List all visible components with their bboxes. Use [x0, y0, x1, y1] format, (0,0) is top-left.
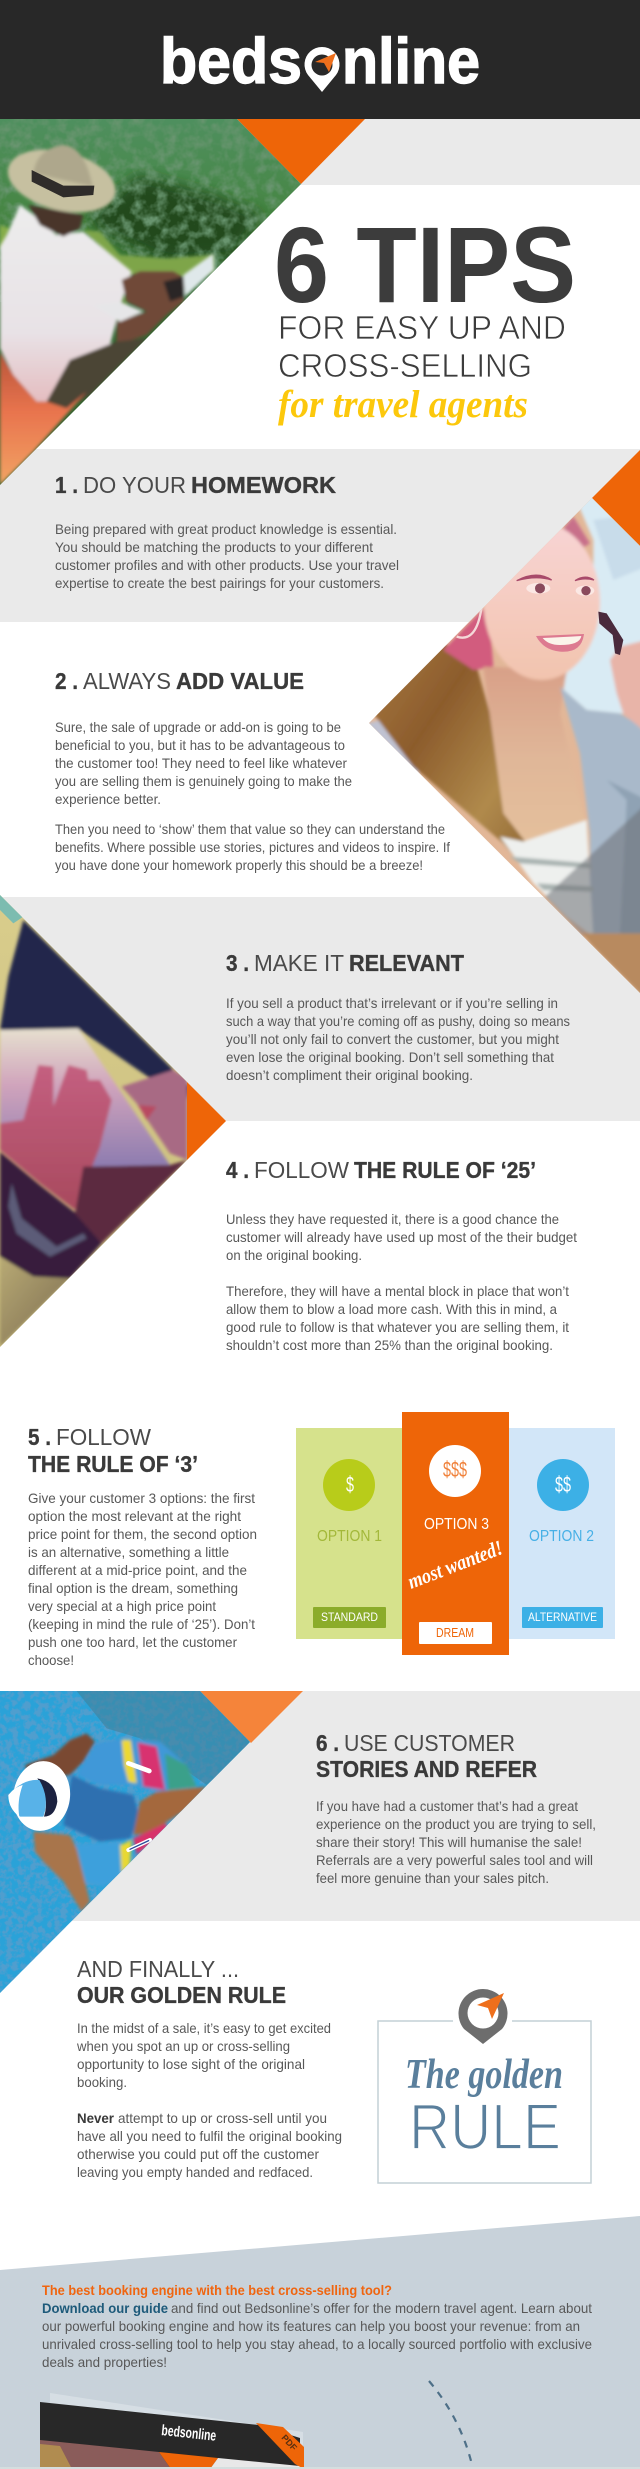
text: tip 5 body: different at a mid-price point, and the	[28, 1563, 247, 1578]
text: tip 5 body: is an alternative, something a little	[28, 1545, 229, 1560]
photo: hands holding tablet	[0, 895, 187, 1347]
heading: tip 4: FOLLOW	[254, 1157, 349, 1183]
text: footer copy: unrivaled cross-selling tool to help you stay ahead, to a locally sourced portfolio with exclusive	[42, 2337, 592, 2352]
text: tip 6 body	[316, 1799, 596, 1886]
text: tip 1 body	[55, 522, 399, 591]
panel: tip 1	[0, 449, 640, 622]
text: tip 5 body: very special at a high price point	[28, 1599, 216, 1614]
text: tip 1 body: Being prepared with great product knowledge is essential.	[55, 522, 397, 537]
panel: golden rule	[76, 1956, 591, 2183]
text: footer copy: The best booking engine with the best cross-selling tool?	[42, 2282, 392, 2298]
text: tip 6 body: share their story! This will humanise the sale!	[316, 1835, 582, 1850]
panel: tip 6	[0, 1691, 640, 1921]
heading: golden rule	[77, 1956, 286, 2008]
text: golden rule body: booking.	[77, 2075, 127, 2090]
logo: bedsonline: nline	[342, 25, 480, 97]
text: tip 1 body: customer profiles and with other products. Use your travel	[55, 558, 399, 573]
heading: tip 5: THE RULE OF ‘3’	[28, 1451, 198, 1477]
text: tip 5 body: Give your customer 3 options: the first	[28, 1491, 255, 1506]
photo: man with tablet in green landscape	[0, 115, 310, 492]
text: tip 2 body: you have done your homework properly this should be a breeze!	[55, 858, 423, 873]
subtitle: FOR EASY UP AND	[278, 309, 566, 346]
text: tip 5 body: (keeping in mind the rule of ‘25’). Don’t	[28, 1617, 255, 1632]
text: tip 6 body: Referrals are a very powerful sales tool and will	[316, 1853, 593, 1868]
text: tip 4 body: allow them to blow a load more cash. With this in mind, a	[226, 1302, 557, 1317]
text: tip 5 body: push one too hard, let the customer	[28, 1635, 237, 1650]
heading: tip 2: 2 .	[55, 668, 78, 694]
arrow: dashed curve	[429, 2381, 473, 2469]
card: option 2	[509, 1428, 615, 1639]
text: tip 2 body: the customer too! They need to feel like whatever	[55, 756, 347, 771]
text: tip 5 body: option the most relevant at the right	[28, 1509, 241, 1524]
card: option 3: DREAM	[436, 1625, 474, 1640]
heading: tip 1: HOMEWORK	[191, 472, 336, 498]
heading: tip 1: DO YOUR	[83, 472, 186, 498]
text: tip 3 body	[226, 996, 570, 1083]
card: option 1	[296, 1428, 402, 1639]
card: option 3	[402, 1412, 509, 1655]
brochure: pdf guide: PDF	[280, 2433, 299, 2453]
text: tip 2 body: experience better.	[55, 792, 161, 807]
card: option 2: OPTION 2	[529, 1528, 594, 1545]
script label: most wanted: most wanted!	[404, 1535, 506, 1594]
card: option 2: $$	[555, 1472, 571, 1497]
text: tip 1 body: expertise to create the best pairings for your customers.	[55, 576, 384, 591]
text: tip 4 body: Therefore, they will have a mental block in place that won’t	[226, 1284, 569, 1299]
badge: the golden rule	[378, 1989, 591, 2183]
heading: tip 3	[226, 950, 464, 976]
text: tip 2 body	[55, 720, 450, 873]
text: tip 2 body: Sure, the sale of upgrade or add-on is going to be	[55, 720, 341, 735]
title: 6 tips: 6 TIPS	[274, 204, 576, 325]
text: tip 3 body: you’ll not only fail to convert the customer, but you might	[226, 1032, 559, 1047]
heading: tip 6: 6 .	[316, 1730, 339, 1756]
heading: tip 3: MAKE IT	[254, 950, 344, 976]
text: tip 4 body: customer will already have used up most of the their budget	[226, 1230, 577, 1245]
text: golden rule body: otherwise you could put off the customer	[77, 2147, 319, 2162]
text: tip 4 body: on the original booking.	[226, 1248, 362, 1263]
text: tip 5 body: choose!	[28, 1653, 74, 1668]
text: tip 5 body	[28, 1491, 257, 1668]
text: golden rule body: have all you need to fulfil the original booking	[77, 2129, 342, 2144]
text: tip 3 body: If you sell a product that’s irrelevant or if you’re selling in	[226, 996, 558, 1011]
photo: smiling woman on phone	[360, 480, 640, 1000]
heading: tip 3: RELEVANT	[349, 950, 464, 976]
card: option 2: ALTERNATIVE	[528, 1610, 597, 1624]
panel: tip 3	[0, 895, 640, 1121]
text: golden rule body: when you spot an up or cross-selling	[76, 2039, 290, 2054]
header bar	[0, 0, 640, 119]
card: option 1: STANDARD	[321, 1610, 378, 1624]
brochure: pdf guide: bedsonline	[161, 2422, 217, 2445]
text: tip 4 body	[226, 1212, 577, 1353]
text: tip 2 body: benefits. Where possible use stories, pictures and videos to inspire. If	[55, 840, 450, 855]
text: footer copy: deals and properties!	[42, 2355, 167, 2370]
text: tip 4 body: shouldn’t cost more than 25% than the original booking.	[226, 1338, 553, 1353]
heading: tip 2	[55, 668, 304, 694]
text: footer copy: our powerful booking engine and how its features can help you boost your revenue: from an	[42, 2319, 580, 2334]
panel: tip 5	[28, 1412, 615, 1668]
logo: bedsonline: beds	[160, 25, 302, 97]
decorative triangle: tip 6 orange	[200, 1691, 303, 1743]
panel: tip 4	[0, 1121, 640, 1371]
badge: the golden rule: The golden	[405, 2052, 563, 2098]
decorative triangle: tip 1 orange	[592, 450, 640, 546]
text: golden rule body: In the midst of a sale, it’s easy to get excited	[77, 2021, 331, 2036]
heading: tip 1: 1 .	[55, 472, 78, 498]
text: golden rule body: attempt to up or cross-sell until you	[118, 2111, 327, 2126]
heading: tip 5: FOLLOW	[56, 1424, 151, 1450]
card: option 3: OPTION 3	[424, 1516, 489, 1533]
script line: for travel agents: for travel agents	[278, 383, 528, 426]
panel: tip 2	[0, 622, 640, 897]
heading: tip 5: 5 .	[28, 1424, 51, 1450]
card: option 3: $$$	[443, 1457, 467, 1482]
subtitle: CROSS-SELLING	[278, 347, 532, 384]
heading: tip 6: STORIES AND REFER	[316, 1756, 537, 1782]
badge: the golden rule: RULE	[409, 2090, 561, 2163]
heading: tip 4	[226, 1157, 536, 1183]
text: tip 4 body: good rule to follow is that whatever you are selling them, it	[226, 1320, 569, 1335]
text: tip 5 body: price point for them, the second option	[28, 1527, 257, 1542]
text: tip 2 body: Then you need to ‘show’ them that value so they can understand the	[55, 822, 445, 837]
text: footer copy	[42, 2282, 592, 2370]
heading: tip 6	[316, 1730, 537, 1782]
text: golden rule body: Never	[77, 2111, 115, 2126]
text: tip 2 body: you are selling them is genuinely going to make the	[55, 774, 352, 789]
text: golden rule body	[76, 2021, 342, 2180]
heading: tip 4: 4 .	[226, 1157, 249, 1183]
heading: golden rule: AND FINALLY ...	[77, 1956, 239, 1982]
text: tip 6 body: experience on the product you are trying to sell,	[316, 1817, 596, 1832]
text: tip 6 body: feel more genuine than your sales pitch.	[316, 1871, 549, 1886]
heading: tip 4: THE RULE OF ‘25’	[354, 1157, 536, 1183]
text: tip 4 body: Unless they have requested it, there is a good chance the	[226, 1212, 559, 1227]
decorative triangle: tip 3 orange	[187, 1082, 226, 1160]
text: golden rule body: opportunity to lose sight of the original	[77, 2057, 305, 2072]
panel: title	[0, 119, 640, 426]
card: option 1: $	[346, 1472, 354, 1497]
text: tip 5 body: final option is the dream, something	[28, 1581, 238, 1596]
photo: woman on pool float	[0, 1691, 250, 1993]
text: footer copy: and find out Bedsonline’s offer for the modern travel agent. Learn about	[171, 2301, 592, 2316]
text: tip 3 body: such a way that you’re coming off as pushy, doing so means	[226, 1014, 570, 1029]
panel: footer call to action	[0, 2216, 640, 2469]
heading: tip 5	[28, 1424, 198, 1477]
text: footer copy: Download our guide	[42, 2300, 168, 2316]
text: golden rule body: leaving you empty handed and redfaced.	[77, 2165, 313, 2180]
heading: tip 3: 3 .	[226, 950, 249, 976]
heading: golden rule: OUR GOLDEN RULE	[77, 1982, 286, 2008]
heading: tip 2: ALWAYS	[83, 668, 171, 694]
logo: bedsonline	[160, 25, 480, 97]
icon: location pin	[458, 1989, 508, 2044]
footer bottom edge	[0, 2467, 640, 2469]
heading: tip 2: ADD VALUE	[176, 668, 304, 694]
heading: tip 1	[55, 472, 336, 498]
text: tip 2 body: beneficial to you, but it has to be advantageous to	[55, 738, 345, 753]
subtitle	[278, 309, 566, 384]
text: tip 1 body: You should be matching the products to your different	[55, 540, 373, 555]
card: option 1: OPTION 1	[317, 1528, 382, 1545]
text: tip 3 body: doesn’t compliment their original booking.	[226, 1068, 473, 1083]
decorative triangle: title orange	[237, 119, 365, 184]
text: tip 6 body: If you have had a customer that’s had a great	[316, 1799, 578, 1814]
brochure: pdf guide	[40, 2393, 304, 2469]
text: tip 3 body: even lose the original booking. Don’t sell something that	[226, 1050, 554, 1065]
heading: tip 6: USE CUSTOMER	[344, 1730, 515, 1756]
